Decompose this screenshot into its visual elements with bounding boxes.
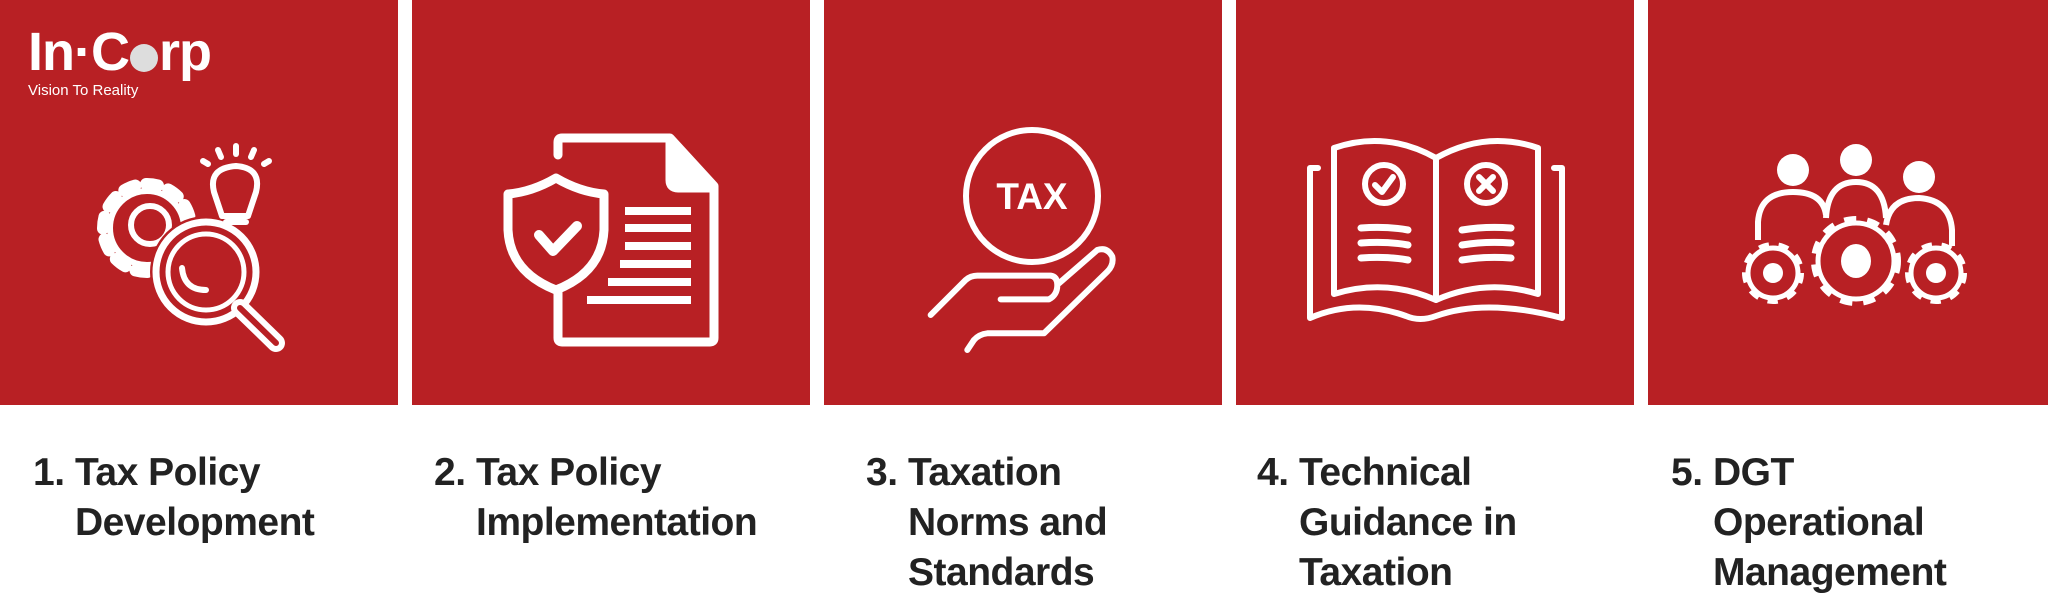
icon: gear, magnifier and bulb — [97, 143, 285, 352]
panel 4: technical guidance — [1236, 0, 1634, 405]
logo: In·C rp — [28, 22, 211, 82]
caption 5: Management — [1713, 551, 1946, 594]
caption 4: Taxation — [1299, 551, 1452, 594]
panel 3: taxation norms — [824, 0, 1222, 405]
panel 2: tax policy implementation — [412, 0, 810, 405]
caption 1: 1. — [33, 451, 65, 494]
caption 5 — [1671, 451, 1946, 594]
caption 4: Technical — [1299, 451, 1472, 494]
caption 3 — [866, 451, 1107, 594]
caption 2: Tax Policy — [476, 451, 661, 494]
logo: Vision To Reality — [28, 82, 138, 99]
caption 3: 3. — [866, 451, 898, 494]
caption 1: Tax Policy — [75, 451, 260, 494]
panel 5: DGT operational management — [1648, 0, 2048, 405]
caption 5: DGT — [1713, 451, 1794, 494]
icon: people with gears — [1742, 144, 1967, 306]
caption 4: 4. — [1257, 451, 1289, 494]
icon: tax coin on hand: TAX — [996, 176, 1068, 217]
caption 5: Operational — [1713, 501, 1924, 544]
caption 2: Implementation — [476, 501, 757, 544]
caption 3: Standards — [908, 551, 1094, 594]
caption 1 — [33, 451, 314, 544]
caption 3: Norms and — [908, 501, 1107, 544]
caption 4: Guidance in — [1299, 501, 1517, 544]
caption 4 — [1257, 451, 1517, 594]
caption 5: 5. — [1671, 451, 1703, 494]
caption 2: 2. — [434, 451, 466, 494]
icon: document with shield — [504, 134, 718, 346]
caption 3: Taxation — [908, 451, 1061, 494]
panel 1: tax policy development — [0, 0, 398, 405]
caption 1: Development — [75, 501, 314, 544]
icon: open book — [1307, 138, 1565, 322]
caption 2 — [434, 451, 757, 544]
icon: tax coin on hand — [928, 127, 1116, 353]
